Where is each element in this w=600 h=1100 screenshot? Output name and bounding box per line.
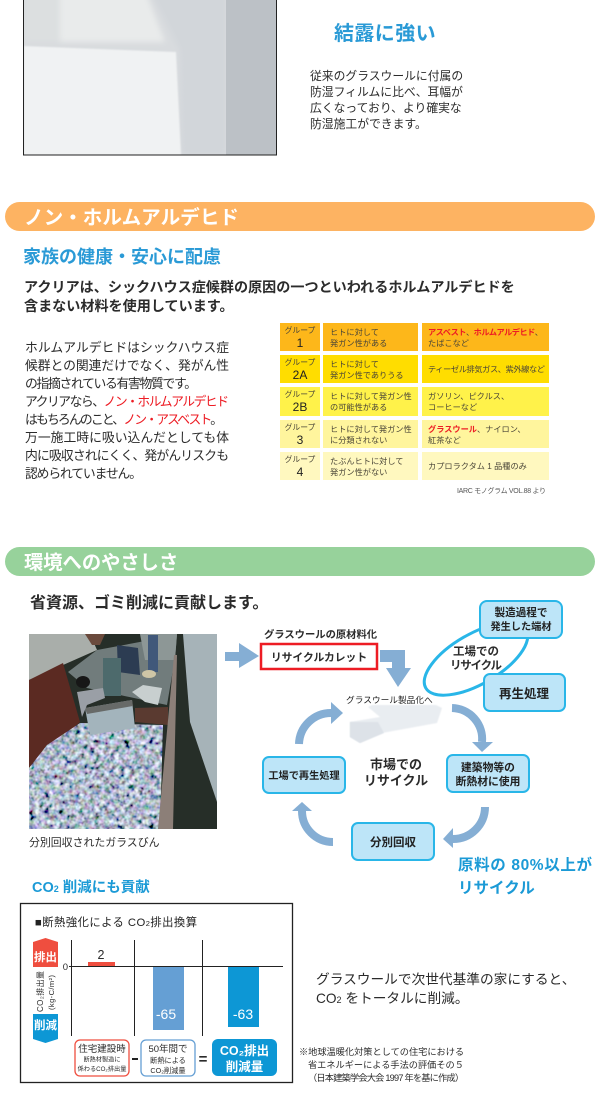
text: factory recycling: 工場での [453, 644, 499, 658]
image: glass wool product: グラスウール製品化へ [346, 694, 433, 705]
row: group 1: ヒトに対して [330, 327, 379, 337]
heading: CO2 reduction: CO2 削減にも貢献 [32, 878, 150, 896]
table: IARC carcinogen groups [280, 323, 549, 480]
arrow: factory to product [299, 702, 343, 744]
heading: family health and safety: 家族の健康・安心に配慮 [23, 246, 221, 267]
row: group 3: グラスウール、ナイロン、 [428, 424, 526, 434]
tag: reduction [33, 1014, 58, 1043]
arrow: bottles to cullet [225, 643, 259, 668]
box: sorted collection [352, 823, 434, 860]
box: used as insulation: 断熱材に使用 [456, 774, 520, 788]
row: group 3 [280, 420, 549, 448]
text block: formaldehyde explanation: はもちろんのこと、ノン・アスベスト。 [25, 412, 223, 427]
row: group 2B: グループ [285, 389, 316, 399]
box: 50-year reduction: CO₂削減量 [150, 1066, 186, 1075]
bar: construction emission 2 [88, 948, 115, 966]
text block: condensation description: 防湿施工ができます。 [310, 117, 427, 131]
row: group 2B: 2B [293, 400, 307, 414]
text block: total CO2 reduction: グラスウールで次世代基準の家にすると、 [316, 971, 575, 987]
panel: CO2 chart [20, 904, 292, 1082]
box: recycled cullet [261, 644, 377, 669]
photo: sorted glass bottles [29, 634, 217, 830]
lead text: Aclear contains no formaldehyde: 含まない材料を使用しています。 [24, 298, 234, 314]
row: group 4 [280, 452, 549, 480]
row: group 2A: 2A [293, 368, 307, 382]
row: group 4: 発ガン性がない [330, 467, 387, 477]
row: group 2A: ティーゼル排気ガス、紫外線など [428, 364, 545, 374]
axis label: CO₂排出量 [35, 971, 45, 1012]
text block: formaldehyde explanation: ホルムアルデヒドはシックハウス症 [25, 340, 229, 355]
box: manufacturing scrap: 製造過程で [495, 606, 547, 619]
box: reprocessing: 再生処理 [499, 686, 549, 701]
text: market recycling: リサイクル [364, 773, 428, 788]
text block: formaldehyde explanation: 万一施工時に吸い込んだとしても体 [25, 430, 229, 445]
caption: sorted glass bottles: 分別回収されたガラスびん [29, 836, 160, 849]
box: 50-year reduction: 50年間で [148, 1043, 188, 1055]
text block: formaldehyde explanation: の指摘されている有害物質です。 [25, 376, 197, 391]
text block: total CO2 reduction [316, 971, 575, 1006]
row: group 2A: ヒトに対して [330, 359, 379, 369]
tag: emission: 排出 [34, 950, 57, 964]
arrow: cullet to product [380, 650, 411, 687]
box: factory reprocessing: 工場で再生処理 [268, 769, 340, 782]
section banner: environment friendly: 環境へのやさしさ [24, 552, 178, 574]
box: reprocessing [484, 674, 565, 711]
text: market recycling: 市場での [370, 757, 422, 772]
zero label: 0 [63, 962, 68, 973]
row: group 3: に分類されない [330, 435, 387, 445]
row: group 2A: 発ガン性でありうる [330, 370, 404, 380]
image: glass wool product [346, 694, 442, 743]
row: group 2B: コーヒーなど [428, 403, 477, 412]
lead text: Aclear contains no formaldehyde: アクリアは、シックハウス症候群の原因の一つといわれるホルムアルデヒドを [24, 279, 515, 295]
photo: glass wool with vapor barrier film [24, 0, 276, 155]
text block: condensation description [310, 69, 463, 131]
row: group 3: 紅茶など [428, 435, 461, 445]
heading: resistant to condensation: 結露に強い [334, 22, 436, 45]
section banner: non-formaldehyde: ノン・ホルムアルデヒド [24, 206, 239, 229]
row: group 2B: ヒトに対して発ガン性 [330, 391, 412, 401]
text block: formaldehyde explanation: 認められていません。 [25, 466, 142, 481]
box: net CO2 reduction: 削減量 [226, 1059, 263, 1074]
box: net CO2 reduction [212, 1039, 277, 1076]
text block: formaldehyde explanation: アクリアなら、ノン・ホルムアルデヒド [25, 394, 229, 409]
footnote: evaluation source: 省エネルギーによる手法の評価その５ [308, 1059, 464, 1070]
section banner: environment friendly [5, 547, 595, 576]
bar: net reduction -63 [228, 967, 259, 1027]
box: construction emissions: 断熱材製造に [83, 1056, 121, 1064]
box: used as insulation [447, 755, 529, 792]
text block: total CO2 reduction: CO2 をトータルに削減。 [316, 990, 469, 1006]
box: 50-year reduction: 断熱による [150, 1056, 186, 1065]
row: group 3: グループ [285, 422, 316, 432]
text: factory recycling [450, 644, 502, 672]
heading: glass wool raw material: グラスウールの原材料化 [264, 628, 378, 641]
box: manufacturing scrap [480, 601, 562, 638]
arrow: collection to factory [292, 802, 333, 842]
chart title: ■断熱強化による CO2排出換算 [35, 915, 197, 929]
footnote: evaluation source [299, 1046, 464, 1083]
equals sign: = [199, 1051, 208, 1068]
text block: condensation description: 従来のグラスウールに付属の [310, 69, 463, 83]
arrow: product to use [452, 708, 493, 752]
text: market recycling [364, 757, 428, 788]
row: group 2B: ガソリン、ピクルス、 [428, 391, 509, 401]
arrow: use to collection [443, 807, 485, 848]
minus sign [132, 1058, 138, 1060]
source note: IARC monograph: IARC モノグラム VOL.88 より [457, 486, 546, 495]
callout: over 80 percent recycled: リサイクル [458, 879, 535, 897]
box: recycled cullet: リサイクルカレット [271, 651, 367, 664]
bar: 50-year reduction -65: -65 [156, 1006, 176, 1022]
row: group 1: たばこなど [428, 339, 469, 348]
callout: over 80 percent recycled [458, 855, 592, 897]
row: group 4: グループ [285, 454, 316, 464]
row: group 3: 3 [297, 433, 304, 447]
box: factory reprocessing [263, 757, 345, 793]
axis label: (kg-C/m²) [47, 974, 56, 1010]
bar chart axes [69, 940, 283, 1036]
row: group 4: カプロラクタム 1 品種のみ [428, 461, 527, 471]
row: group 2A: グループ [285, 357, 316, 367]
box: construction emissions [75, 1040, 129, 1076]
row: group 1: 1 [297, 336, 304, 350]
row: group 1: アスベスト、ホルムアルデヒド、 [428, 327, 543, 337]
footnote: evaluation source: ※地球温暖化対策としての住宅における [299, 1046, 464, 1057]
row: group 1: 発ガン性がある [330, 338, 387, 348]
row: group 2B: の可能性がある [330, 402, 387, 412]
tag: reduction: 削減 [34, 1018, 57, 1032]
tag: emission [33, 938, 58, 967]
text block: formaldehyde explanation [25, 340, 229, 481]
lead text: Aclear contains no formaldehyde [24, 279, 515, 314]
ring: factory recycling [413, 608, 539, 710]
bar: 50-year reduction -65 [153, 967, 184, 1030]
row: group 2A [280, 355, 549, 383]
box: construction emissions: 住宅建設時 [78, 1043, 126, 1055]
callout: over 80 percent recycled: 原料の 80%以上が [458, 855, 592, 874]
bar: construction emission 2: 2 [98, 948, 105, 962]
box: manufacturing scrap: 発生した端材 [490, 620, 552, 633]
text block: condensation description: 防湿フィルムに比べ、耳幅が [310, 85, 463, 99]
box: sorted collection: 分別回収 [370, 835, 416, 849]
row: group 2B [280, 387, 549, 416]
text block: condensation description: 広くなっており、より確実な [310, 101, 462, 115]
row: group 1: グループ [285, 325, 316, 335]
row: group 1 [280, 323, 549, 351]
box: used as insulation: 建築物等の [461, 760, 515, 774]
row: group 4: たぶんヒトに対して [330, 456, 403, 466]
row: group 4: 4 [297, 465, 304, 479]
text block: formaldehyde explanation: 候群との関連だけでなく、発がん性 [25, 358, 229, 373]
box: construction emissions: 係わるCO₂排出量 [78, 1065, 126, 1073]
text: factory recycling: リサイクル [450, 659, 502, 672]
section banner: non-formaldehyde [5, 202, 595, 231]
footnote: evaluation source: （日本建築学会大会 1997 年を基に作成） [308, 1072, 464, 1083]
box: net CO2 reduction: CO₂排出 [220, 1043, 269, 1058]
bar: net reduction -63: -63 [233, 1006, 253, 1022]
axis label [35, 971, 56, 1012]
text block: formaldehyde explanation: 内に吸収されにくく、発がんリスクも [25, 448, 229, 463]
box: 50-year reduction [141, 1040, 195, 1076]
lead text: resource saving and waste reduction: 省資源、ゴミ削減に貢献します。 [30, 593, 268, 612]
row: group 3: ヒトに対して発ガン性 [330, 424, 412, 434]
